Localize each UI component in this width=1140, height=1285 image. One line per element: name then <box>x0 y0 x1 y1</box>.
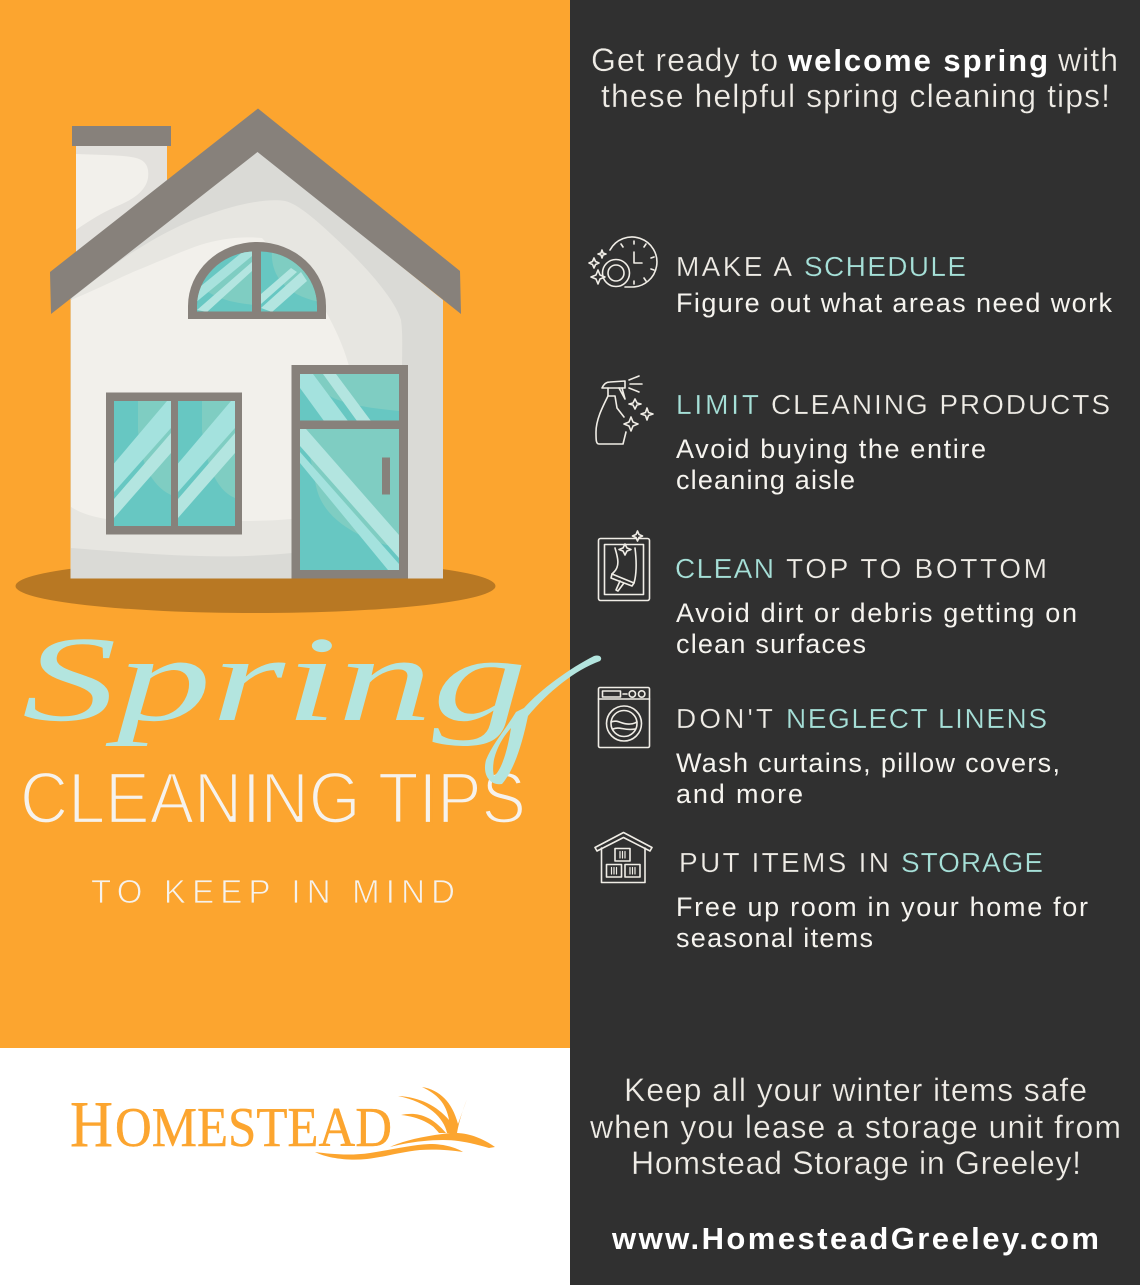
tip 2: cleaning products: Avoid buying the entire <box>676 434 986 464</box>
tip 5: storage: Free up room in your home for <box>676 892 1088 922</box>
tip 3: top to bottom: clean surfaces <box>676 629 866 659</box>
tip 1: schedule: MAKE A <box>676 251 792 282</box>
panel: white logo background <box>0 1048 570 1285</box>
closing text <box>589 1072 1121 1181</box>
logo grass mark <box>315 1087 495 1160</box>
heading: spring script <box>22 612 601 784</box>
intro text: Get ready to <box>591 42 778 78</box>
house wall <box>70 150 443 578</box>
subheading: to keep in mind: TO KEEP IN MIND <box>91 873 455 910</box>
icon: clock and plate <box>589 237 657 287</box>
tip 3: top to bottom: CLEAN <box>675 553 774 584</box>
tip 2: cleaning products <box>596 376 1110 495</box>
icon: storage building <box>595 832 652 882</box>
tip 3: top to bottom <box>598 531 1077 659</box>
tip 2: cleaning products: CLEANING PRODUCTS <box>771 389 1110 420</box>
ground shadow <box>16 559 496 613</box>
tip 4: linens: NEGLECT LINENS <box>786 703 1047 734</box>
logo wordmark <box>70 1088 392 1161</box>
chimney <box>72 126 171 256</box>
heading: spring script: Spring <box>22 612 527 747</box>
intro text: these helpful spring cleaning tips! <box>601 78 1110 114</box>
door <box>292 365 408 578</box>
tip 1: schedule <box>589 237 1112 318</box>
intro text: with <box>1057 42 1118 78</box>
closing text: when you lease a storage unit from <box>589 1109 1121 1145</box>
icon: window squeegee <box>598 531 650 600</box>
intro text: welcome spring <box>787 43 1048 78</box>
tip 1: schedule: SCHEDULE <box>804 251 966 282</box>
heading: cleaning tips: CLEANING TIPS <box>20 759 526 839</box>
lower window <box>106 392 242 534</box>
panel: dark background <box>570 0 1140 1285</box>
icon: washing machine <box>598 688 650 748</box>
tip 4: linens <box>598 688 1060 809</box>
closing text: Homstead Storage in Greeley! <box>631 1145 1081 1181</box>
tip 5: storage: seasonal items <box>676 923 873 953</box>
tip 4: linens: and more <box>676 779 803 809</box>
script flourish <box>485 655 601 784</box>
logo: Homestead <box>70 1087 495 1161</box>
tip 2: cleaning products: cleaning aisle <box>676 465 855 495</box>
roof <box>50 108 461 314</box>
panel: orange background <box>0 0 570 1048</box>
tip 2: cleaning products: LIMIT <box>676 389 759 420</box>
tip 4: linens: DON'T <box>676 703 773 734</box>
logo wordmark: H <box>70 1088 113 1161</box>
tip 3: top to bottom: Avoid dirt or debris getting on <box>676 598 1077 628</box>
tip 5: storage <box>595 832 1088 953</box>
tip 5: storage: PUT ITEMS IN <box>679 847 889 878</box>
closing text: Keep all your winter items safe <box>624 1072 1087 1108</box>
tip 1: schedule: Figure out what areas need work <box>676 288 1112 318</box>
arched window <box>188 242 326 319</box>
icon: spray bottle <box>596 376 653 444</box>
tip 3: top to bottom: TOP TO BOTTOM <box>786 553 1047 584</box>
tip 4: linens: Wash curtains, pillow covers, <box>676 748 1060 778</box>
website url: www.HomesteadGreeley.com <box>611 1221 1099 1256</box>
intro text <box>591 42 1118 114</box>
tip 5: storage: STORAGE <box>901 847 1043 878</box>
logo wordmark: OMESTEAD <box>115 1097 392 1159</box>
illustration: house <box>16 108 496 613</box>
